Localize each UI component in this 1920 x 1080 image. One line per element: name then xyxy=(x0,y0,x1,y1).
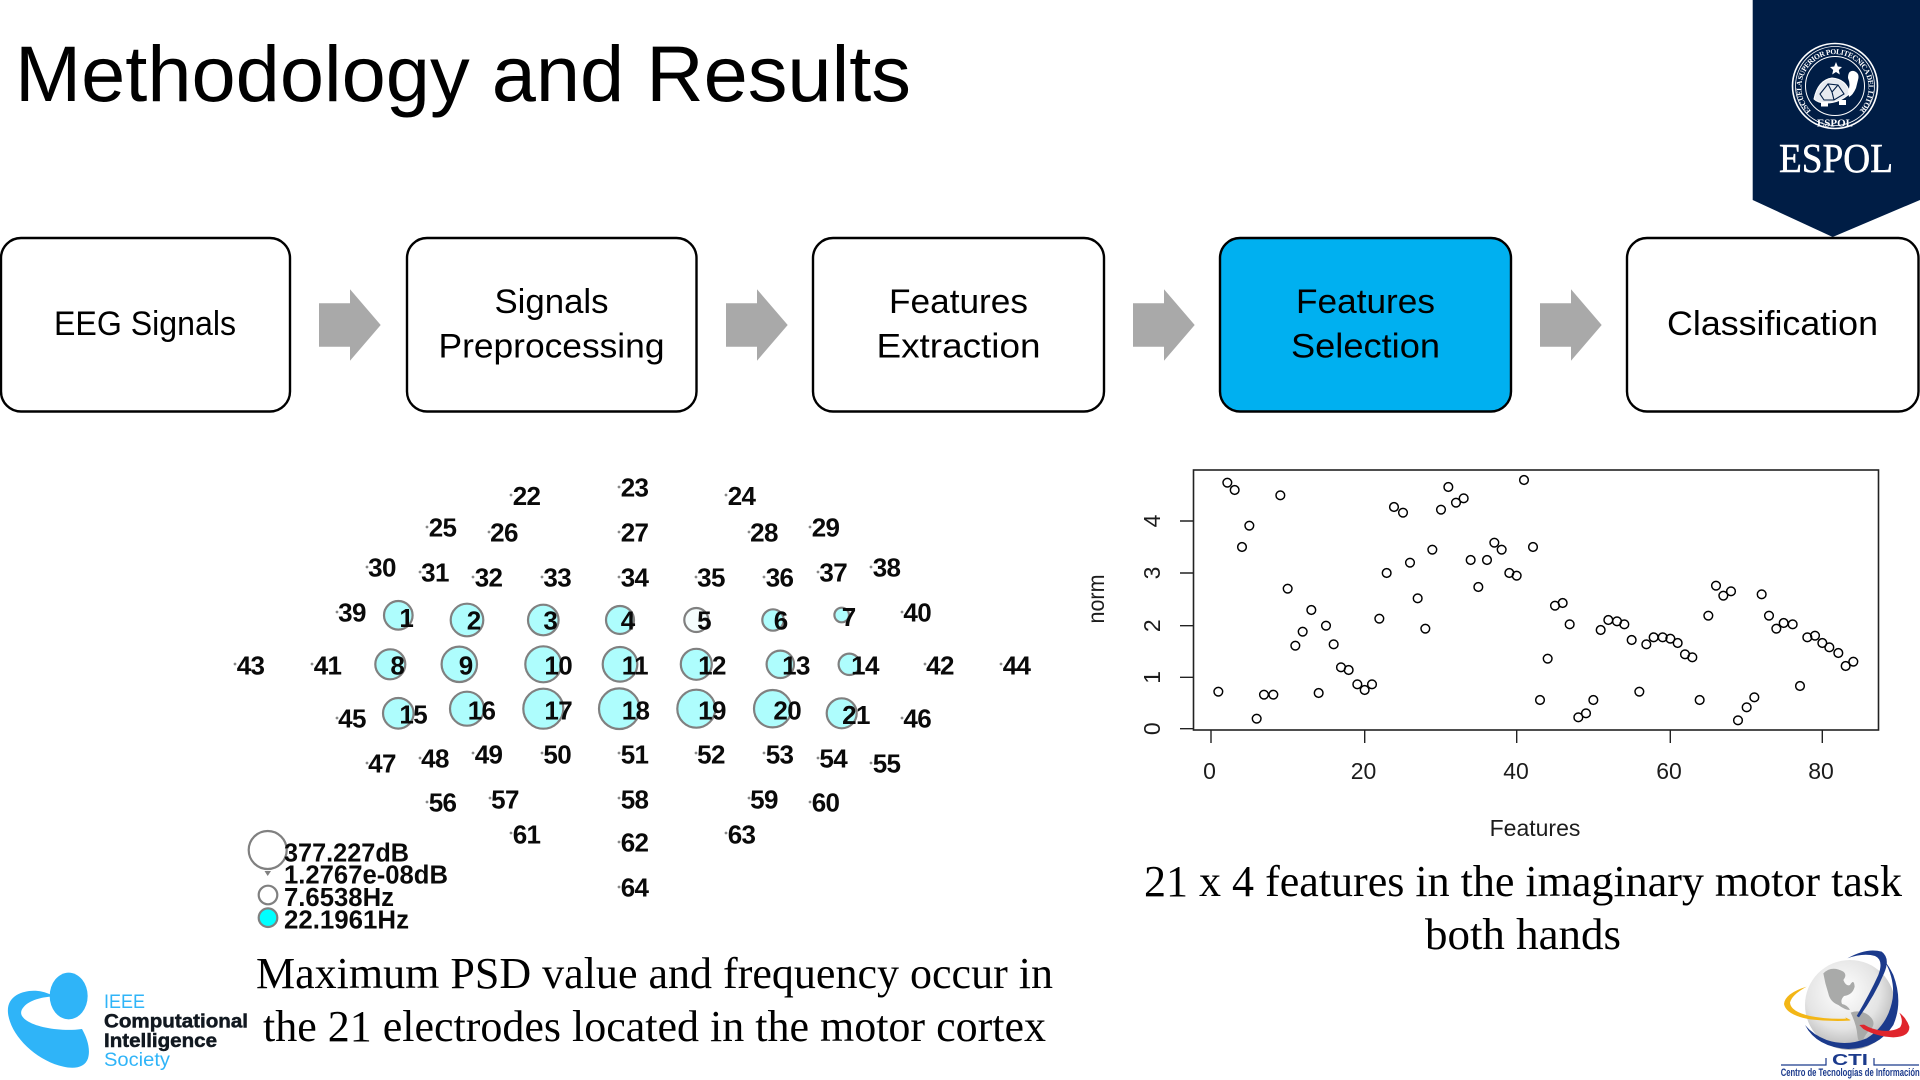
electrode number labels: 44 xyxy=(1003,650,1032,680)
electrode number labels: 37 xyxy=(819,558,847,588)
flow step: Classification: Classification xyxy=(1667,305,1878,343)
electrode number labels: 62 xyxy=(621,828,649,858)
flow step: Features Extraction: Features xyxy=(889,283,1028,321)
icon: IEEE CIS mark xyxy=(8,973,89,1068)
arrow 1 xyxy=(319,289,381,361)
electrode number labels: 7 xyxy=(842,602,856,632)
ESPOL wordmark: ESPOL xyxy=(1779,135,1893,181)
electrode number labels: 47 xyxy=(368,749,396,779)
electrode number labels: 61 xyxy=(513,819,541,849)
electrode number labels: 18 xyxy=(622,695,650,725)
axis ticks xyxy=(1180,521,1822,743)
electrode number labels: 59 xyxy=(750,784,778,814)
electrode number labels: 39 xyxy=(338,598,366,628)
chart: electrode topographic map xyxy=(235,473,1032,934)
electrode number labels: 58 xyxy=(621,784,649,814)
x axis labels: 60 xyxy=(1656,758,1682,784)
caption: electrode map: the 21 electrodes located in the motor cortex xyxy=(263,1002,1046,1051)
flow step: EEG Signals: EEG Signals xyxy=(54,305,236,343)
y axis labels: 1 xyxy=(1139,671,1165,684)
caption: scatter plot: 21 x 4 features in the imaginary motor task xyxy=(1144,857,1902,906)
electrode number labels: 17 xyxy=(544,695,572,725)
flow step: Features Extraction: Extraction xyxy=(876,328,1040,366)
electrode number labels: 29 xyxy=(812,513,840,543)
legend: size and colour scale: 7.6538Hz xyxy=(284,884,394,912)
electrode number labels: 1 xyxy=(399,603,413,633)
y axis labels: 3 xyxy=(1139,567,1165,579)
electrode number labels: 31 xyxy=(421,558,449,588)
caption: scatter plot xyxy=(1144,857,1902,959)
electrode number labels: 21 xyxy=(842,700,870,730)
electrode number labels: 63 xyxy=(728,819,756,849)
icon: continents and orbits xyxy=(1784,950,1909,1049)
electrode number labels: 16 xyxy=(468,695,496,725)
electrode number labels xyxy=(237,473,1032,903)
electrode number labels: 28 xyxy=(750,518,778,548)
electrode number labels: 9 xyxy=(459,650,473,680)
icon: ESPOL seal xyxy=(1792,42,1878,130)
x axis labels: 0 xyxy=(1203,758,1216,784)
data points 1 to 40 xyxy=(1214,478,1521,723)
flow step: Signals Preprocessing: Signals xyxy=(494,283,608,321)
electrode number labels: 20 xyxy=(773,695,801,725)
x axis labels xyxy=(1203,758,1834,841)
flow step: Features Selection (highlighted): Selection xyxy=(1291,328,1440,366)
logo: ESPOL banner xyxy=(1752,0,1920,237)
electrode number labels: 64 xyxy=(621,873,650,903)
arrow 4 xyxy=(1540,289,1602,361)
electrode number labels: 23 xyxy=(621,473,649,503)
electrode number labels: 8 xyxy=(390,650,404,680)
electrode number labels: 2 xyxy=(467,605,481,635)
icon: globe xyxy=(1805,960,1895,1050)
electrode number labels: 41 xyxy=(314,650,342,680)
flow step: Classification xyxy=(1627,238,1918,412)
y axis labels xyxy=(1083,514,1165,735)
electrode number labels: 13 xyxy=(782,650,810,680)
CTI wordmark: CTI xyxy=(1832,1052,1868,1069)
x axis labels: 40 xyxy=(1503,758,1529,784)
electrode number labels: 34 xyxy=(621,563,650,593)
flow step: Features Selection (highlighted): Features xyxy=(1296,283,1435,321)
electrode number labels: 27 xyxy=(621,518,649,548)
logo: IEEE Computational Intelligence Society: IEEE xyxy=(104,992,145,1013)
flow step: EEG Signals xyxy=(1,238,290,412)
electrode number labels: 60 xyxy=(812,788,840,818)
electrode number labels: 15 xyxy=(399,699,427,729)
electrode number labels: 40 xyxy=(903,598,931,628)
electrode number labels: 49 xyxy=(475,739,503,769)
electrode number labels: 5 xyxy=(697,605,711,635)
x axis labels: Features xyxy=(1490,815,1580,841)
electrode number labels: 46 xyxy=(903,704,931,734)
electrode number labels: 3 xyxy=(543,605,557,635)
electrode number labels: 11 xyxy=(622,650,648,680)
electrode number labels: 32 xyxy=(475,563,503,593)
logo: CTI globe xyxy=(1781,950,1920,1079)
electrode number labels: 6 xyxy=(774,605,788,635)
logo: IEEE Computational Intelligence Society: Society xyxy=(104,1049,170,1071)
electrode number labels: 43 xyxy=(237,650,265,680)
electrode number labels: 51 xyxy=(621,739,649,769)
electrode number labels: 35 xyxy=(697,563,725,593)
electrode number labels: 24 xyxy=(728,481,757,511)
title: Methodology and Results xyxy=(15,29,911,118)
electrode number labels: 53 xyxy=(766,739,794,769)
y axis labels: norm xyxy=(1083,574,1109,624)
x axis labels: 80 xyxy=(1808,758,1834,784)
electrode number labels: 33 xyxy=(543,563,571,593)
electrode number labels: 38 xyxy=(873,553,901,583)
electrode number labels: 12 xyxy=(698,650,726,680)
flow step: Signals Preprocessing: Preprocessing xyxy=(438,328,664,366)
y axis labels: 4 xyxy=(1139,514,1165,527)
caption: electrode map: Maximum PSD value and frequency occur in xyxy=(256,949,1053,998)
electrode number labels: 14 xyxy=(851,650,880,680)
legend: size and colour scale: 377.227dB xyxy=(284,840,409,868)
electrode number labels: 10 xyxy=(544,650,572,680)
logo: IEEE Computational Intelligence Society: Intelligence xyxy=(104,1030,217,1052)
flow step: Features Extraction xyxy=(813,238,1104,412)
electrode number labels: 4 xyxy=(621,605,636,635)
CTI wordmark xyxy=(1781,1052,1920,1079)
legend: size and colour scale: 1.2767e-08dB xyxy=(284,861,448,889)
legend: size and colour scale xyxy=(249,831,448,934)
caption: electrode map xyxy=(256,949,1053,1051)
electrode number labels: 30 xyxy=(368,553,396,583)
arrow 3 xyxy=(1133,289,1195,361)
y axis labels: 0 xyxy=(1139,722,1165,735)
flow step: Signals Preprocessing xyxy=(407,238,696,412)
data points 41 to 84 xyxy=(1520,476,1858,725)
electrode number labels: 22 xyxy=(513,481,541,511)
arrow 2 xyxy=(726,289,788,361)
electrode number labels: 55 xyxy=(873,749,901,779)
electrode number labels: 52 xyxy=(697,739,725,769)
flow step: Features Selection (highlighted) xyxy=(1220,238,1511,412)
logo: IEEE Computational Intelligence Society xyxy=(8,973,248,1071)
plot frame xyxy=(1194,470,1878,730)
chart: scatter plot of feature norm xyxy=(1083,470,1878,841)
electrode circles xyxy=(375,601,860,729)
electrode number labels: 54 xyxy=(819,743,848,773)
electrode number labels: 19 xyxy=(698,695,726,725)
electrode number labels: 42 xyxy=(926,650,954,680)
caption: scatter plot: both hands xyxy=(1425,910,1621,959)
electrode number labels: 26 xyxy=(490,518,518,548)
electrode number labels: 50 xyxy=(543,739,571,769)
electrode number labels: 57 xyxy=(491,784,519,814)
electrode number labels: 25 xyxy=(429,513,457,543)
legend: size and colour scale: 22.1961Hz xyxy=(284,906,409,934)
electrode number labels: 36 xyxy=(766,563,794,593)
logo: IEEE Computational Intelligence Society: Computational xyxy=(104,1010,248,1032)
electrode number labels: 48 xyxy=(421,743,449,773)
electrode number labels: 56 xyxy=(429,788,457,818)
electrode number labels: 45 xyxy=(338,704,366,734)
icon: ESPOL seal: ESPOL xyxy=(1817,118,1853,130)
y axis labels: 2 xyxy=(1139,619,1165,632)
x axis labels: 20 xyxy=(1351,758,1376,784)
